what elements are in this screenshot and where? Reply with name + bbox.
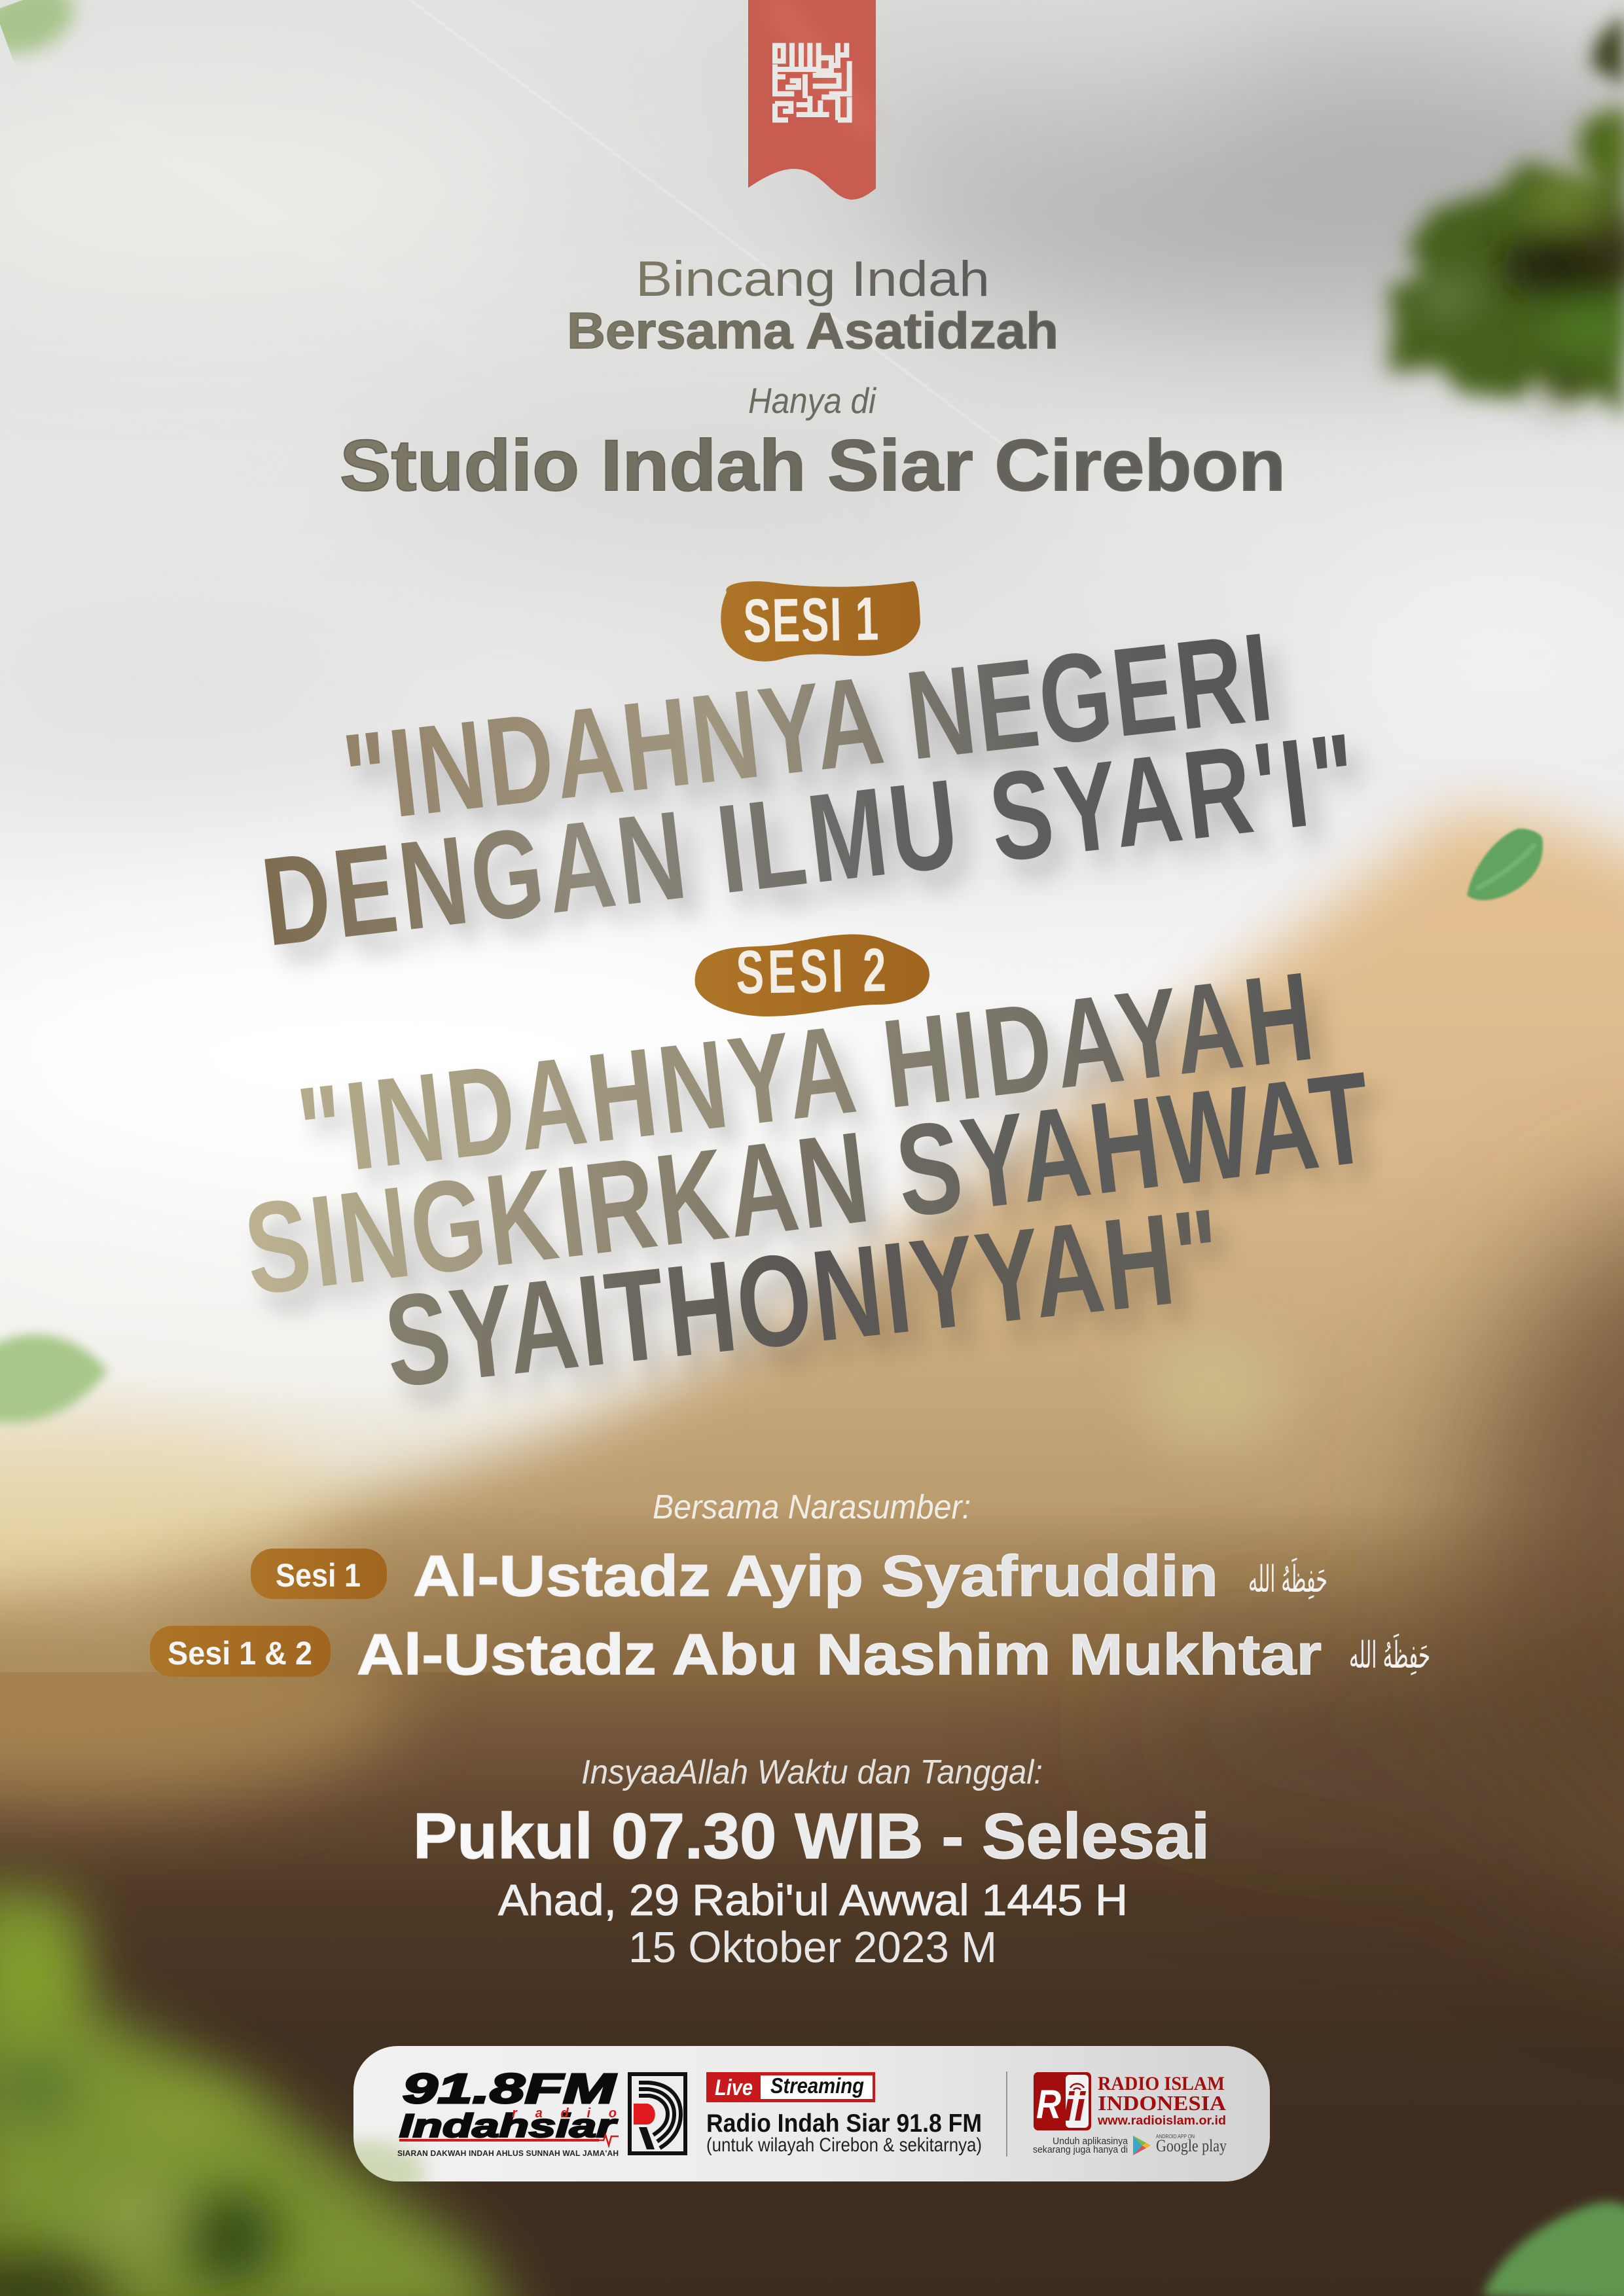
leaf right — [1467, 829, 1543, 901]
session 1 title: DENGAN ILMU SYAR'I" — [255, 706, 1363, 973]
background: light streaks — [0, 0, 1021, 458]
background: warm glow — [1139, 1329, 1283, 1446]
logo: Radio Islam Indonesia: www.radioislam.or.id — [1097, 2114, 1226, 2128]
badge: Live Streaming: Live — [715, 2075, 753, 2100]
background: ground left glow — [0, 1672, 424, 1846]
speaker row 2: حَفِظَهُ الله — [1349, 1634, 1430, 1677]
ribbon with kufic emblem — [748, 0, 876, 200]
session 1 title: "INDAHNYA NEGERI — [337, 606, 1278, 849]
leaf left — [0, 1335, 108, 1422]
logo: Radio Islam Indonesia — [1034, 2072, 1226, 2130]
text: download app: sekarang juga hanya di — [1033, 2144, 1128, 2155]
background: tan hill — [0, 812, 1624, 1833]
text: station name: Radio Indah Siar 91.8 FM — [706, 2109, 982, 2138]
session 2 title: SINGKIRKAN SYAHWAT — [238, 1044, 1378, 1322]
text: Bersama Narasumber: Bersama Narasumber: — [653, 1488, 971, 1526]
text: download app — [1033, 2136, 1128, 2155]
logo: 91.8FM Indah Siar: SIARAN DAKWAH INDAH AHLUS SUNNAH WAL JAMA'AH — [397, 2149, 619, 2158]
logo: R mark — [630, 2074, 685, 2153]
background: right shade — [1100, 1204, 1624, 1911]
badge: Sesi 1 — [721, 581, 920, 662]
heading: Studio Indah Siar Cirebon: Studio Indah Siar Cirebon — [340, 425, 1286, 506]
speaker row 1: Sesi 1 — [276, 1557, 361, 1594]
icon: kufic basmalah — [775, 43, 850, 120]
leaf top left — [0, 0, 83, 66]
background: fade into ground — [232, 1529, 1550, 1672]
time: Pukul 07.30 WIB - Selesai — [413, 1800, 1210, 1872]
logo: Radio Islam Indonesia: ii — [1063, 2085, 1087, 2130]
speaker row 1: Al-Ustadz Ayip Syafruddin — [413, 1543, 1218, 1608]
hijri date: Ahad, 29 Rabi'ul Awwal 1445 H — [498, 1876, 1128, 1925]
badge: Sesi 2 — [695, 934, 929, 1016]
session 2 title: "INDAHNYA HIDAYAH — [291, 945, 1320, 1202]
session 2 title: SYAITHONIYYAH" — [378, 1181, 1227, 1414]
logo: Radio Islam Indonesia: RADIO ISLAM — [1098, 2073, 1225, 2094]
session 2 title — [238, 945, 1378, 1414]
text: Google Play: ANDROID APP ON — [1156, 2134, 1195, 2140]
background: pale left glow — [0, 1420, 327, 1590]
speaker row 2: Al-Ustadz Abu Nashim Mukhtar — [357, 1622, 1322, 1687]
text: region: (untuk wilayah Cirebon & sekitarnya) — [706, 2134, 982, 2156]
heading: Bincang Indah: Bincang Indah — [636, 251, 990, 307]
logo: Radio Islam Indonesia: R — [1036, 2082, 1061, 2127]
logo: 91.8FM Indah Siar: 91.8FM — [403, 2065, 617, 2112]
logo: Radio Islam Indonesia: INDONESIA — [1098, 2091, 1226, 2115]
logo: 91.8FM Indah Siar: Indahsiar — [399, 2108, 618, 2144]
badge: Live Streaming — [706, 2072, 875, 2102]
badge: Sesi 2: SESI 2 — [736, 936, 886, 1007]
logo: 91.8FM Indah Siar — [397, 2065, 619, 2158]
text: download app: Unduh aplikasinya — [1053, 2136, 1128, 2147]
heading: Bersama Asatidzah: Bersama Asatidzah — [567, 302, 1058, 359]
speaker row 2: Sesi 1 & 2 — [168, 1635, 312, 1672]
leaf bottom right — [1483, 2202, 1624, 2296]
text: InsyaaAllah Waktu dan Tanggal: InsyaaAllah Waktu dan Tanggal: — [581, 1753, 1043, 1791]
logo: 91.8FM Indah Siar: radio — [512, 2106, 617, 2121]
text: Hanya di: Hanya di — [748, 380, 877, 421]
tree top right — [1388, 13, 1624, 419]
icon: play store — [1133, 2136, 1151, 2155]
sponsor card — [353, 2046, 1270, 2181]
speaker row 1: حَفِظَهُ الله — [1248, 1558, 1327, 1601]
speaker row 1 — [251, 1543, 1327, 1608]
speaker row 2 — [150, 1622, 1430, 1687]
bush bottom left — [0, 1885, 524, 2296]
background: ground — [0, 1672, 1624, 2296]
gregorian date: 15 Oktober 2023 M — [628, 1923, 997, 1972]
badge: Sesi 1: SESI 1 — [743, 584, 879, 656]
badge: Live Streaming: Streaming — [770, 2073, 864, 2098]
text: Google Play: Google play — [1156, 2136, 1227, 2155]
